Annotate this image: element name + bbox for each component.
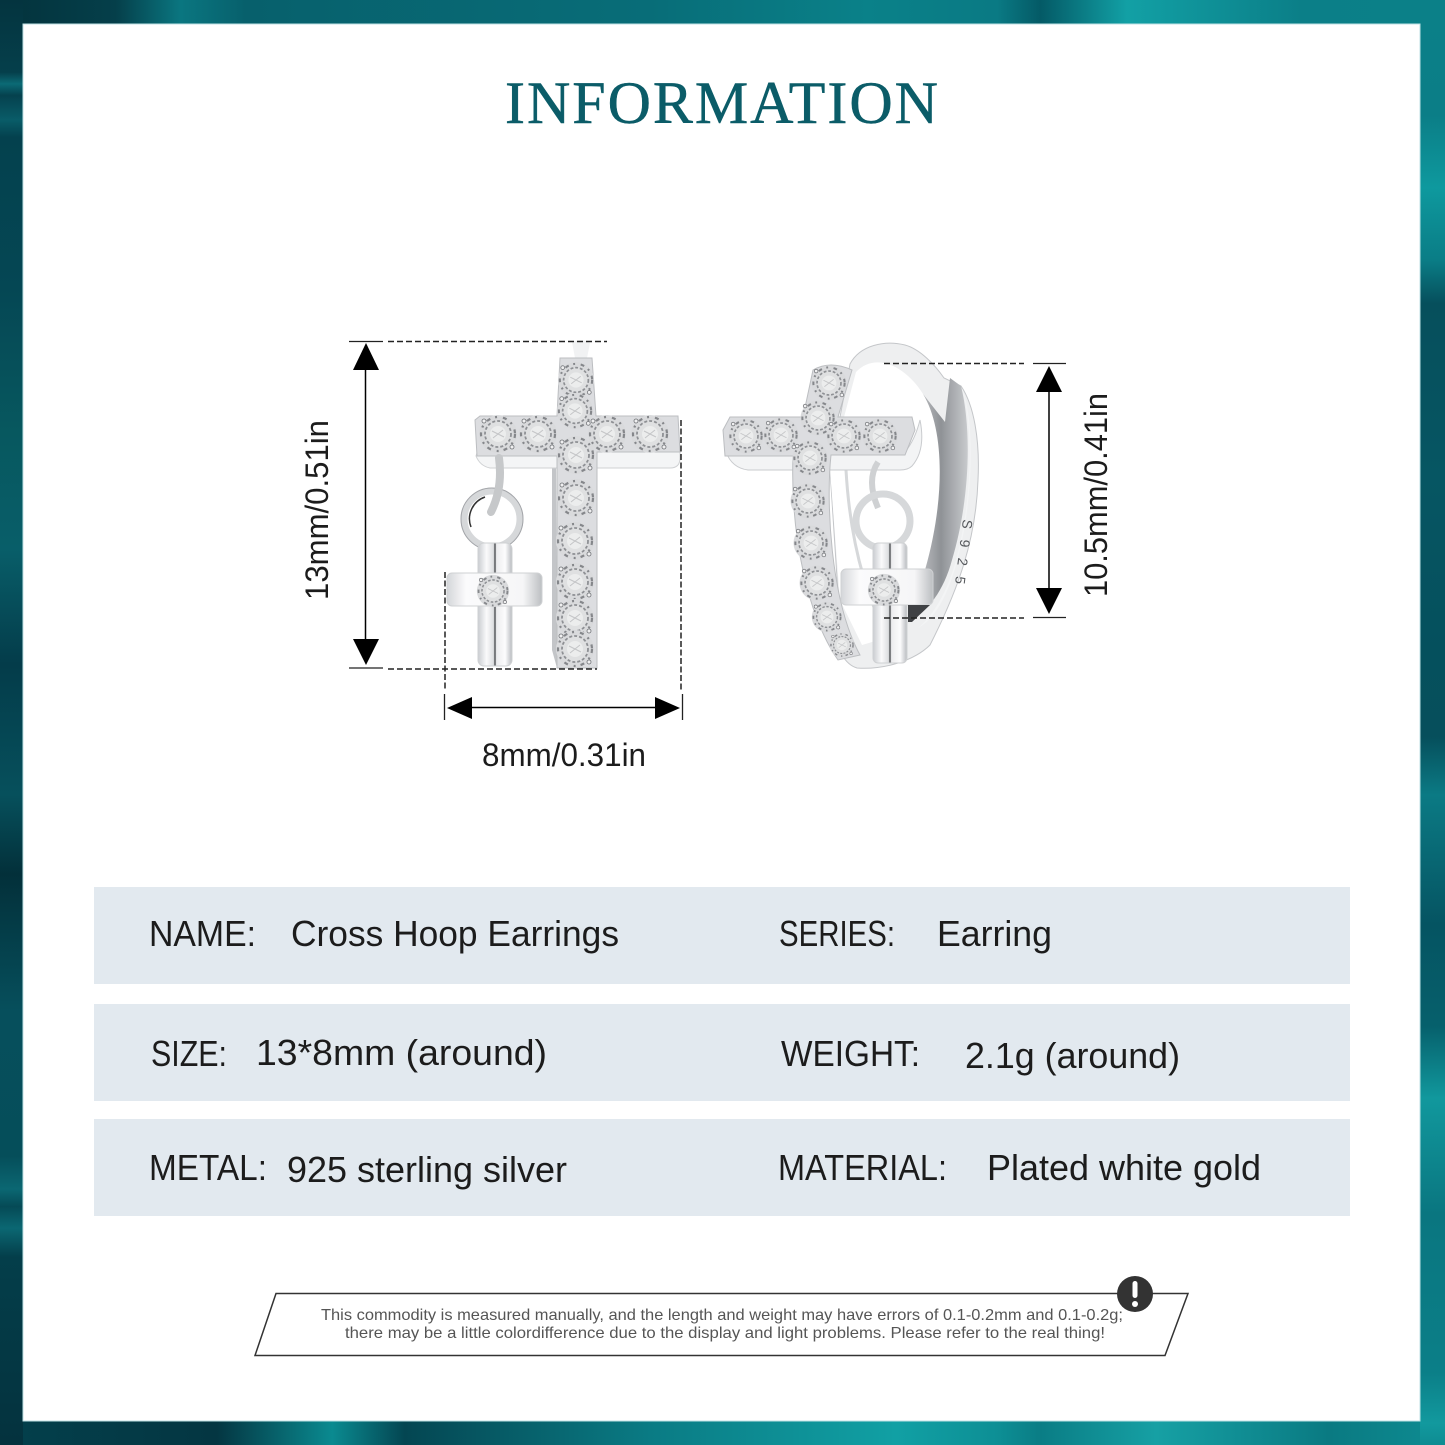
label: 10.5mm: 10.5mm/0.41in [1078, 393, 1114, 597]
disclaimer [255, 1276, 1188, 1356]
disclaimer text: there may be a little colordifference due to the display and light problems. Please refer to the real thing! [345, 1325, 1105, 1342]
hoop outer silhouette [830, 343, 978, 668]
material label: MATERIAL: [778, 1147, 947, 1188]
small cross horizontal [841, 569, 933, 605]
bail [872, 462, 878, 508]
size value: 13*8mm (around) [256, 1032, 547, 1073]
row: metal and material [94, 1119, 1350, 1216]
material value: Plated white gold [987, 1147, 1261, 1188]
metal value: 925 sterling silver [287, 1149, 567, 1190]
small cross vertical [478, 543, 512, 666]
cross arm underside [726, 420, 922, 470]
pave gems vertical [556, 362, 595, 668]
shadow wedge [908, 605, 930, 622]
weight value: 2.1g (around) [965, 1035, 1180, 1076]
ring [461, 488, 523, 550]
dimension: width 8mm [444, 420, 682, 773]
S925 stamp: S925 [952, 519, 976, 585]
cross arm underside [476, 450, 680, 468]
size label: SIZE: [151, 1033, 227, 1074]
metal label: METAL: [149, 1147, 267, 1188]
pave gems vertical [791, 366, 854, 657]
name value: Cross Hoop Earrings [291, 913, 619, 954]
icon: warning [1117, 1276, 1153, 1312]
pave gems horizontal [479, 415, 669, 453]
disclaimer text: This commodity is measured manually, and the length and weight may have errors of 0.1-0.2mm and 0.1-0.2g; [321, 1307, 1123, 1324]
right earring [723, 343, 978, 668]
pave gems horizontal [729, 418, 897, 453]
left earring [447, 340, 680, 668]
small cross vertical [873, 543, 907, 663]
series label: SERIES: [779, 913, 895, 954]
dimension: height 10.5mm [884, 364, 1114, 618]
label: 13mm: 13mm/0.51in [299, 420, 335, 600]
hoop hole [830, 362, 941, 645]
row: size and weight [94, 1004, 1350, 1101]
cross body [475, 358, 680, 668]
inner body [846, 470, 895, 650]
disclaimer text [321, 1307, 1123, 1342]
row: name and series [94, 887, 1350, 984]
name label: NAME: [149, 913, 256, 954]
hoop back edge [552, 462, 557, 668]
hoop outer band [918, 388, 971, 628]
dimension: height 13mm [299, 342, 607, 669]
hoop stub top [572, 340, 590, 358]
cross body [723, 365, 915, 660]
label: 8mm: 8mm/0.31in [482, 737, 646, 773]
small cross horizontal [447, 573, 542, 606]
title: INFORMATION [505, 70, 938, 136]
small cross gem [477, 575, 509, 607]
bail [491, 458, 500, 512]
small cross gem [868, 574, 900, 606]
hoop inner [908, 378, 968, 622]
series value: Earring [937, 913, 1052, 954]
ring [856, 494, 910, 548]
weight label: WEIGHT: [781, 1033, 920, 1074]
